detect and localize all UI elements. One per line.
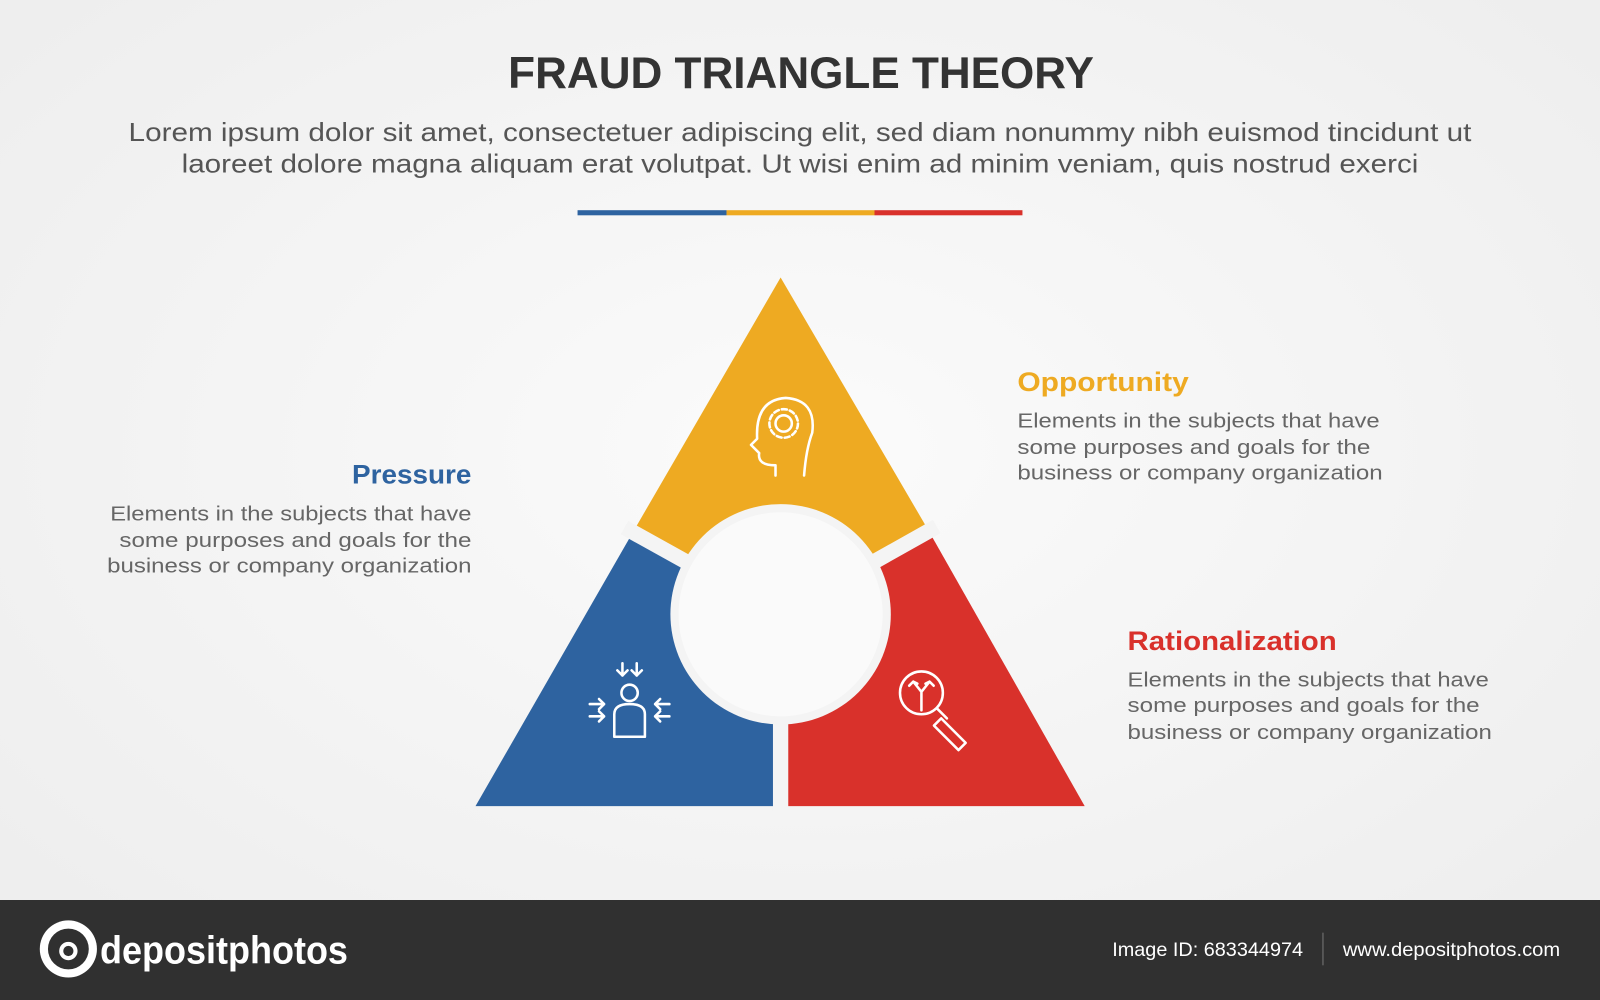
label: rationalization: Elements in the subjects that have <box>1128 670 1489 692</box>
label: opportunity: some purposes and goals for the <box>1017 437 1370 459</box>
segment: opportunity (top) <box>633 278 929 614</box>
icon: magnifier with decision arrows <box>900 671 966 750</box>
triangle diagram <box>476 278 1085 811</box>
label: pressure <box>107 460 471 577</box>
footer bar: depositphotos <box>100 929 348 972</box>
footer bar <box>0 900 1600 1000</box>
segment: pressure (left) <box>476 533 781 806</box>
subtitle: laoreet dolore magna aliquam erat volutpat. Ut wisi enim ad minim veniam, quis nostrud exerci <box>182 150 1418 178</box>
label: opportunity <box>1017 367 1383 485</box>
label: opportunity: Opportunity <box>1017 367 1189 397</box>
icon: head with gear <box>751 398 813 476</box>
icon: person under pressure <box>590 663 669 737</box>
subtitle: Lorem ipsum dolor sit amet, consectetuer adipiscing elit, sed diam nonummy nibh euismod tincidunt ut <box>129 119 1471 147</box>
title: FRAUD TRIANGLE THEORY <box>508 47 1094 98</box>
label: opportunity: business or company organization <box>1017 463 1383 485</box>
label: pressure: Elements in the subjects that have <box>110 503 471 525</box>
segment: rationalization (right) <box>781 531 1085 806</box>
label: rationalization: some purposes and goals for the <box>1128 695 1480 717</box>
footer bar: www.depositphotos.com <box>1342 939 1560 961</box>
label: rationalization: business or company organization <box>1128 722 1492 744</box>
footer bar: Image ID: 683344974 <box>1112 939 1303 961</box>
icon: logo camera <box>40 920 97 978</box>
label: opportunity: Elements in the subjects that have <box>1017 411 1380 433</box>
label: pressure: Pressure <box>352 460 471 490</box>
label: pressure: business or company organization <box>107 555 471 577</box>
label: rationalization: Rationalization <box>1128 626 1337 656</box>
label: pressure: some purposes and goals for the <box>119 530 471 552</box>
subtitle <box>129 119 1471 178</box>
color underline <box>578 210 1022 215</box>
label: rationalization <box>1128 626 1492 744</box>
